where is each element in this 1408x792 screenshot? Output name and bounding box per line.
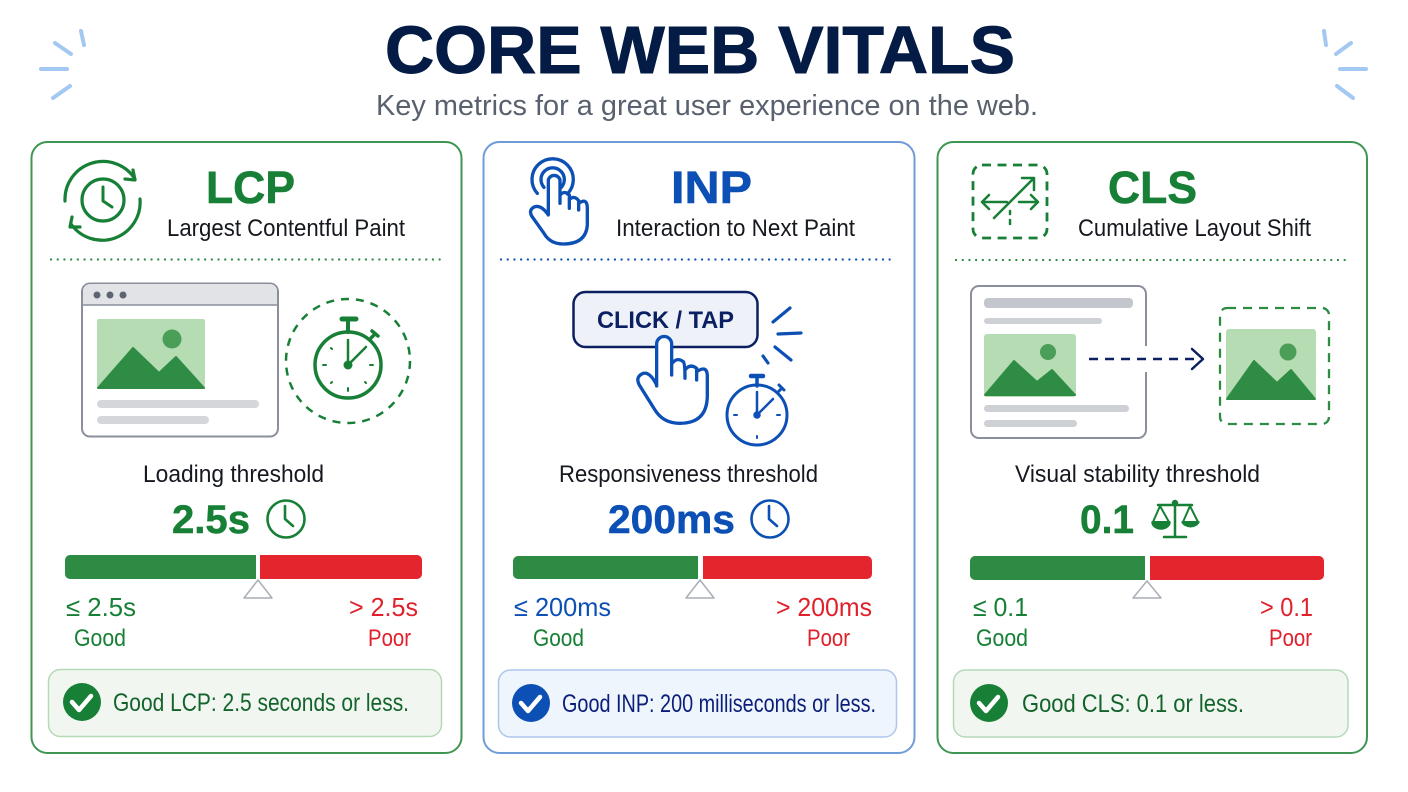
icon: clock — [752, 500, 788, 538]
icon: stopwatch — [727, 376, 787, 445]
heading: LCP: LCP — [206, 162, 295, 213]
illustration: page before shift — [971, 286, 1152, 438]
callout: good LCP: Good LCP: 2.5 seconds or less. — [113, 689, 409, 717]
illustration: click / tap button — [574, 292, 758, 347]
label: good range: ≤ 0.1 — [973, 592, 1028, 622]
label: poor range: > 200ms — [776, 592, 872, 622]
callout: good CLS: Good CLS: 0.1 or less. — [1022, 690, 1244, 718]
panel: CLS — [938, 142, 1367, 753]
label: poor: Poor — [807, 625, 850, 652]
label: good range: ≤ 200ms — [514, 592, 611, 622]
arrow: shift — [1089, 349, 1203, 369]
icon: layout shift — [973, 165, 1047, 238]
label: good range: ≤ 2.5s — [66, 592, 136, 622]
heading: CLS: CLS — [1108, 162, 1197, 213]
label: poor: Poor — [1269, 625, 1312, 652]
illustration: click / tap button: CLICK / TAP — [597, 307, 734, 334]
subheading: Cumulative Layout Shift: Cumulative Layout Shift — [1078, 215, 1311, 242]
icon: stopwatch in dashed circle — [286, 299, 410, 423]
callout: good INP: Good INP: 200 milliseconds or less. — [562, 690, 876, 718]
threshold bar — [513, 556, 872, 598]
icon: LCP refresh clock — [65, 161, 140, 240]
icon: right sparkle rays — [1324, 31, 1366, 98]
icon: click rays — [763, 308, 801, 363]
value: 0.1: 0.1 — [1080, 498, 1134, 542]
icon: tapping hand — [531, 159, 587, 244]
label: good: Good — [533, 625, 584, 652]
threshold bar — [65, 555, 422, 598]
label: good: Good — [74, 625, 126, 652]
label: poor range: > 0.1 — [1260, 592, 1313, 622]
icon: left sparkle rays — [41, 31, 84, 98]
value: 2.5s: 2.5s — [172, 498, 250, 542]
label: poor: Poor — [368, 625, 411, 652]
callout: good INP — [498, 670, 896, 737]
label: poor range: > 2.5s — [349, 592, 418, 622]
subtitle: Key metrics for a great user experience on the web. — [376, 90, 1038, 122]
callout: good LCP — [48, 670, 442, 736]
panel: LCP — [32, 142, 462, 753]
label: good: Good — [976, 625, 1028, 652]
illustration: shifted image — [1220, 308, 1329, 424]
icon: clock — [268, 500, 304, 538]
icon: balance scale — [1152, 501, 1199, 537]
title: CORE WEB VITALS — [385, 13, 1015, 88]
icon: hand pressing button — [638, 336, 707, 423]
label: loading threshold: Loading threshold — [143, 461, 324, 488]
label: visual stability threshold: Visual stability threshold — [1015, 461, 1260, 488]
subheading: Interaction to Next Paint: Interaction to Next Paint — [616, 215, 855, 242]
subheading: Largest Contentful Paint: Largest Contentful Paint — [167, 215, 405, 242]
threshold bar — [970, 556, 1324, 598]
heading: INP: INP — [671, 162, 752, 213]
label: responsiveness threshold: Responsiveness threshold — [559, 461, 818, 488]
panel: INP — [484, 142, 914, 753]
value: 200ms: 200ms — [608, 498, 735, 542]
callout: good CLS — [954, 670, 1348, 737]
illustration: browser window — [82, 284, 278, 436]
